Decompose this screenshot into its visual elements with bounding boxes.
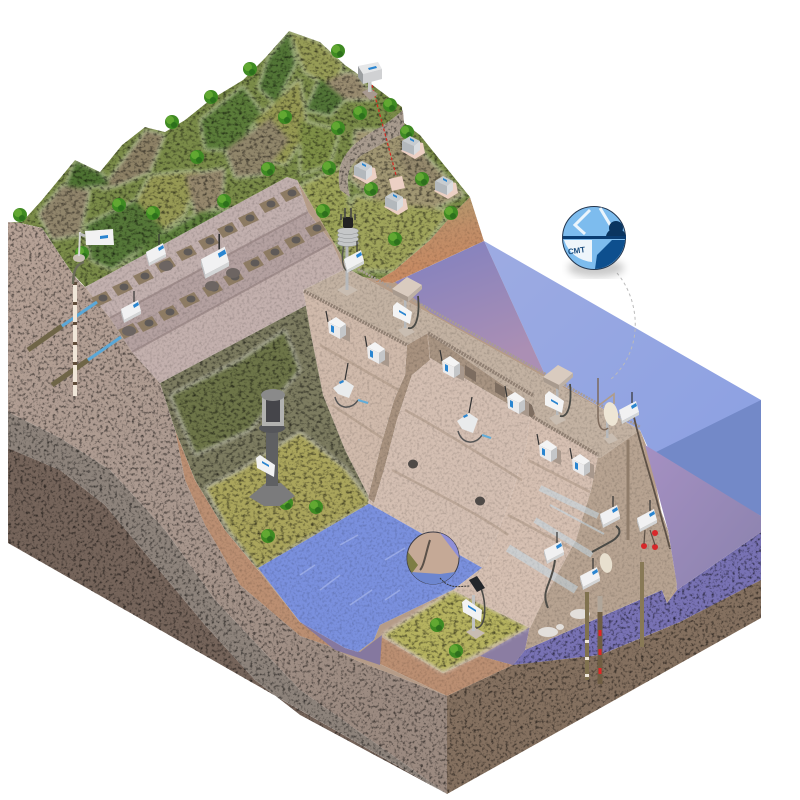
left slope instruments <box>28 229 240 396</box>
purple bedrock under reservoir <box>513 532 761 665</box>
lantern roof <box>261 389 285 401</box>
terrain underlay <box>8 180 761 794</box>
seepage white spots <box>538 609 590 637</box>
cream gateway lower <box>598 552 614 574</box>
slope logger post <box>79 232 80 256</box>
base <box>398 325 415 337</box>
dam end section wedge <box>525 430 677 650</box>
post <box>556 385 558 415</box>
wedge logger right with red sensors <box>637 500 658 550</box>
pole cable <box>73 262 84 284</box>
lantern body <box>262 396 284 426</box>
mountain vegetation and rock facets <box>38 31 465 272</box>
front rail left <box>304 291 407 345</box>
piezometer rods <box>587 562 642 684</box>
screen top pattern <box>575 208 612 234</box>
mountain terrain <box>8 31 484 287</box>
rod centre top <box>598 596 602 612</box>
hilltop sensors <box>353 62 458 215</box>
post <box>472 595 475 631</box>
orange left slope band <box>175 430 513 696</box>
grass patch lower <box>382 590 530 673</box>
cable <box>476 588 485 628</box>
bushes <box>13 44 463 658</box>
dam left buttress shadow <box>368 332 430 503</box>
front rail middle <box>428 333 534 396</box>
inset cable <box>420 540 430 570</box>
dashed connector to remote monitoring circle <box>610 273 635 380</box>
spillway antenna logger <box>201 234 229 279</box>
dam middle curved face <box>368 355 534 570</box>
person head <box>609 221 623 235</box>
pink concrete block <box>389 176 405 191</box>
tower logger tag <box>262 461 269 467</box>
dam right segment face <box>453 414 598 628</box>
person shoulders <box>606 228 626 236</box>
left cross-section face of earth <box>8 222 447 794</box>
dam horizontal lift lines <box>320 345 590 548</box>
crack meter logger middle <box>457 397 491 442</box>
monitoring tower <box>249 389 295 506</box>
cable <box>560 384 571 416</box>
reservoir water darker side plane <box>650 400 761 516</box>
internal gallery vertical shaft <box>626 440 630 540</box>
mountain base surface <box>8 31 470 287</box>
right cross-section face of earth <box>447 578 761 794</box>
circle shadow <box>568 259 624 277</box>
weather station on crest <box>337 208 364 296</box>
spillway stepped concrete <box>85 177 345 383</box>
red dashed extensometer line <box>372 85 396 175</box>
crest gateway left <box>392 277 422 337</box>
spillway round sensors <box>122 261 240 336</box>
crest gateway right <box>543 365 573 425</box>
spillway small logger <box>121 291 141 323</box>
wedge logger upper <box>600 496 620 528</box>
purple slope behind dam <box>395 241 545 375</box>
reservoir water back surface <box>484 241 761 516</box>
cross bracket <box>598 394 614 406</box>
station mast <box>346 240 348 290</box>
purple wedge under dam <box>480 627 530 665</box>
inset connector <box>440 578 470 587</box>
tower logger <box>256 455 275 477</box>
solar logger station <box>462 576 485 639</box>
tall mast <box>598 378 608 430</box>
crest cream gateway and logger <box>598 378 639 444</box>
logger panel <box>462 599 482 622</box>
gallery band below deck <box>428 333 537 418</box>
base <box>466 627 485 639</box>
rod right <box>640 562 644 647</box>
solar panel <box>469 576 485 592</box>
screen frame bar <box>563 236 626 239</box>
front rail right <box>533 417 598 455</box>
upper collar <box>259 423 285 433</box>
basin earth edge band <box>175 430 530 696</box>
column <box>266 430 278 486</box>
wind sensor spikes <box>341 208 355 220</box>
lantern windows <box>266 400 280 422</box>
crest logger <box>344 241 364 273</box>
grey mid rock layer <box>8 412 447 794</box>
inclined borehole blue upper <box>62 302 97 326</box>
station base <box>337 284 358 296</box>
vertical pole segments <box>73 282 77 396</box>
panel tag <box>551 399 558 405</box>
logger tag <box>468 605 476 612</box>
inset sky wedge <box>440 533 459 558</box>
panel tag <box>399 310 406 316</box>
dam left segment face <box>303 290 410 505</box>
inclined borehole anchor upper <box>28 326 62 350</box>
crack meter logger left <box>333 363 368 407</box>
gallery openings <box>465 365 538 418</box>
antenna <box>543 365 573 390</box>
purple slope right of dam <box>645 445 761 590</box>
piezometer logger <box>580 558 600 590</box>
curved cliff on mountain <box>339 110 405 197</box>
hilltop logger base <box>362 88 378 100</box>
dam face instruments <box>326 311 670 608</box>
slope logger body <box>80 229 114 245</box>
seepage light beams <box>508 488 604 590</box>
dam deck <box>303 268 640 458</box>
cable from lower left logger <box>545 560 555 608</box>
inset water <box>411 572 455 584</box>
inclined borehole anchor lower <box>52 360 88 385</box>
hilltop logger <box>358 62 382 84</box>
circle base <box>562 206 626 270</box>
person silhouette <box>595 240 625 269</box>
downstream water pool <box>258 503 483 652</box>
rod centre <box>598 596 602 684</box>
base <box>549 413 566 425</box>
radiation shield <box>338 228 358 246</box>
purple lower band <box>300 622 382 665</box>
dam <box>303 268 677 650</box>
wind sensor head <box>343 217 353 228</box>
wedge logger lower left <box>544 532 564 564</box>
spillway lower step <box>132 243 345 383</box>
dam crest long cable <box>634 417 670 548</box>
logo text: CMT <box>567 245 586 257</box>
base <box>603 433 618 444</box>
lower left screen <box>564 240 592 262</box>
green rocky slope <box>160 300 376 570</box>
panel <box>545 391 564 413</box>
inclined borehole blue lower <box>88 337 121 360</box>
panel <box>393 302 412 324</box>
dark lower rock layer <box>8 448 447 794</box>
antenna <box>392 277 422 302</box>
rod left marks <box>585 640 589 680</box>
inset magnifier: dam detail <box>407 532 470 587</box>
inset green edge <box>407 552 418 573</box>
rod centre red marks <box>598 630 602 684</box>
rod left <box>585 592 589 680</box>
hilltop logger post <box>368 80 372 92</box>
post <box>606 418 608 438</box>
vertical borehole pole <box>73 282 77 396</box>
cable <box>408 296 419 328</box>
cream gateway <box>602 401 620 427</box>
valley slope below spillway <box>160 300 376 570</box>
grass field upper <box>205 432 372 570</box>
post <box>404 298 406 328</box>
spillway step shadows <box>110 212 332 352</box>
remote monitoring circle <box>562 206 626 277</box>
inset clip disc <box>407 532 459 584</box>
spillway top step <box>85 177 308 318</box>
back rail <box>358 269 640 427</box>
hilltop boxes <box>401 136 425 159</box>
cable <box>342 245 352 271</box>
spillway anchors <box>91 186 326 339</box>
cable from upper wedge logger <box>592 526 619 552</box>
crest logger <box>619 392 639 424</box>
darker vegetation patch <box>170 330 300 455</box>
earth strip below mountain <box>375 197 484 283</box>
upper light rock layer <box>8 222 447 794</box>
water ripples <box>300 535 405 605</box>
slope logger base <box>73 254 85 262</box>
tilt sensors on spillway <box>146 234 166 266</box>
star base <box>249 483 295 506</box>
dam inspection ports <box>408 460 485 506</box>
spillway middle step <box>110 212 332 352</box>
